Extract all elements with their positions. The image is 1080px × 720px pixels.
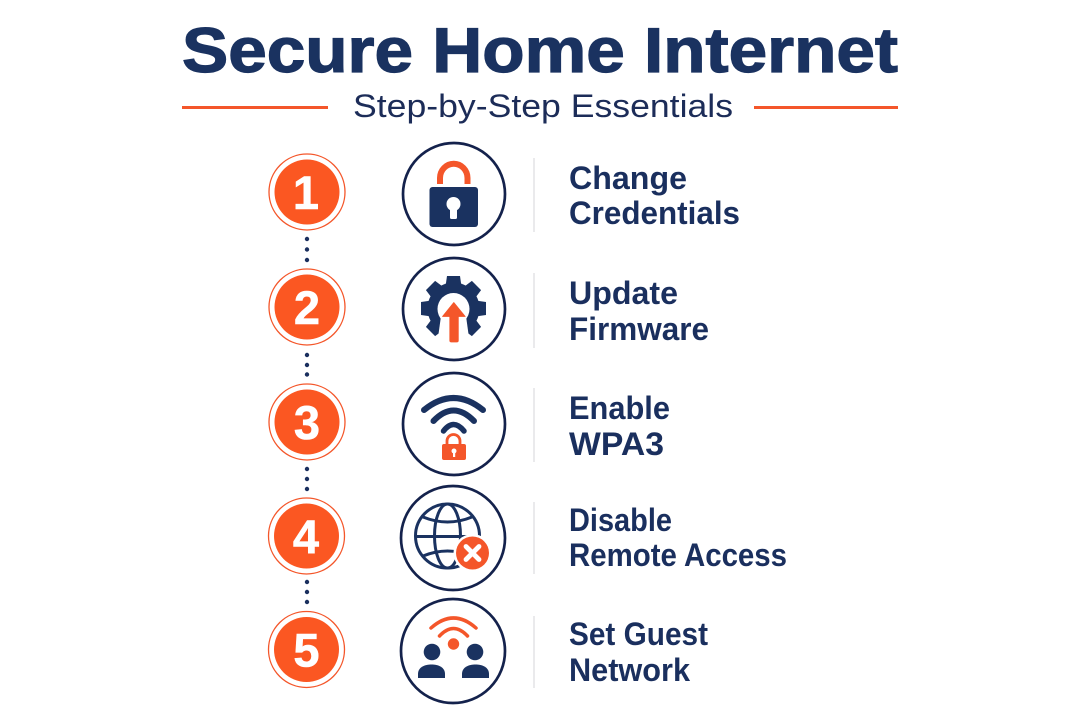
connector dots 2-3 (305, 353, 309, 377)
icon: wifi with lock (403, 373, 505, 475)
number badge 5: 5 (293, 624, 320, 676)
number badge 1 (269, 154, 345, 230)
connector dots 3-4 (305, 467, 309, 491)
connector dots 1-2 (305, 237, 309, 262)
divider and label: set guest network: Set Guest (569, 616, 708, 652)
connector dots 4-5 (305, 580, 309, 604)
divider and label: change credentials: Change (569, 160, 687, 196)
divider and label: change credentials (534, 158, 740, 232)
icon: gear with up arrow (403, 258, 505, 360)
subtitle: Step-by-Step Essentials (353, 88, 733, 124)
number badge 2 (269, 269, 345, 345)
divider and label: enable wpa3 (534, 388, 670, 462)
icon: guest network (401, 599, 505, 703)
number badge 2: 2 (294, 281, 320, 334)
number badge 1: 1 (293, 166, 319, 219)
number badge 5 (268, 612, 344, 688)
number badge 4: 4 (293, 510, 319, 563)
divider and label: update firmware: Update (569, 275, 678, 311)
number badge 4 (268, 498, 344, 574)
divider and label: update firmware (534, 273, 709, 348)
divider and label: disable remote access (534, 502, 787, 574)
step 4 (268, 486, 787, 604)
icon: padlock (403, 143, 505, 245)
step 2 (269, 258, 709, 377)
divider and label: change credentials: Credentials (569, 195, 740, 231)
step 1 (269, 143, 740, 262)
divider and label: disable remote access: Disable (569, 502, 672, 538)
divider and label: enable wpa3: WPA3 (569, 426, 664, 462)
number badge 3 (269, 384, 345, 460)
divider and label: enable wpa3: Enable (569, 390, 670, 426)
step 3 (269, 373, 670, 491)
title: Secure Home Internet (182, 16, 898, 86)
divider and label: update firmware: Firmware (569, 311, 709, 347)
subtitle (182, 88, 898, 124)
divider and label: set guest network (534, 616, 708, 688)
icon: globe with x badge (401, 486, 505, 590)
number badge 3: 3 (294, 396, 320, 449)
divider and label: disable remote access: Remote Access (569, 537, 787, 573)
divider and label: set guest network: Network (569, 652, 690, 688)
step 5 (268, 599, 708, 703)
